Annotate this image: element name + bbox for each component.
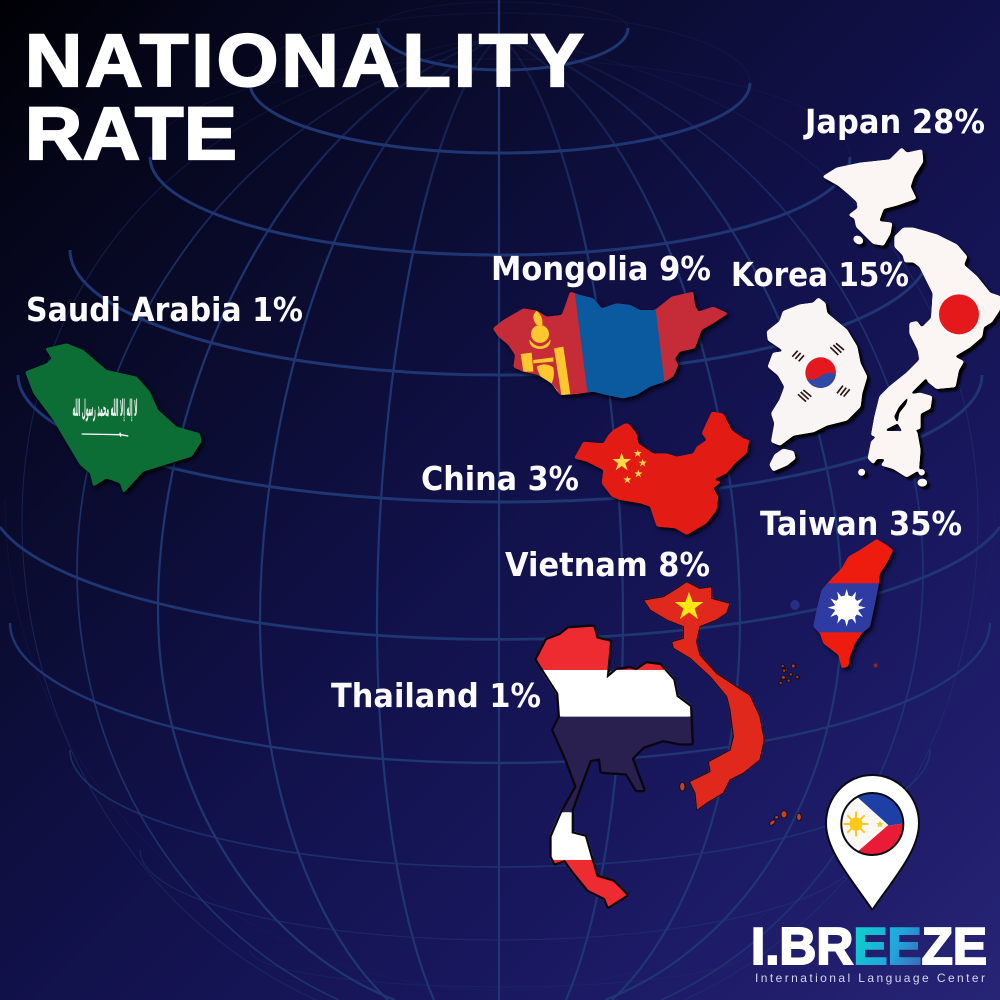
label: Mongolia: Mongolia 9% [491, 249, 711, 288]
label: Japan: Japan 28% [803, 102, 985, 141]
text: لا إله إلا الله محمد رسول الله [72, 396, 138, 422]
label: China: China 3% [421, 459, 579, 498]
label: Korea: Korea 15% [731, 255, 909, 294]
map: Mongolia [493, 292, 730, 403]
map: Korea [767, 298, 867, 471]
map: Saudi Arabia [25, 343, 202, 493]
map: Vietnam [643, 582, 801, 826]
map: China [574, 412, 749, 535]
map: Japan [823, 148, 1000, 486]
label: Taiwan: Taiwan 35% [760, 504, 962, 543]
label: Saudi Arabia: Saudi Arabia 1% [26, 290, 303, 329]
logo: I.BREEZE: International Language Center [755, 971, 985, 985]
label: Thailand: Thailand 1% [331, 676, 541, 715]
title [25, 20, 584, 175]
map: Taiwan [779, 537, 897, 685]
label: Vietnam: Vietnam 8% [505, 545, 710, 584]
logo: I.BREEZE: I.BREEZE [751, 918, 987, 976]
icon: map pin with Philippine flag [826, 775, 919, 910]
title: RATE [25, 93, 237, 175]
map: Thailand [530, 623, 697, 910]
title: NATIONALITY [25, 20, 584, 102]
